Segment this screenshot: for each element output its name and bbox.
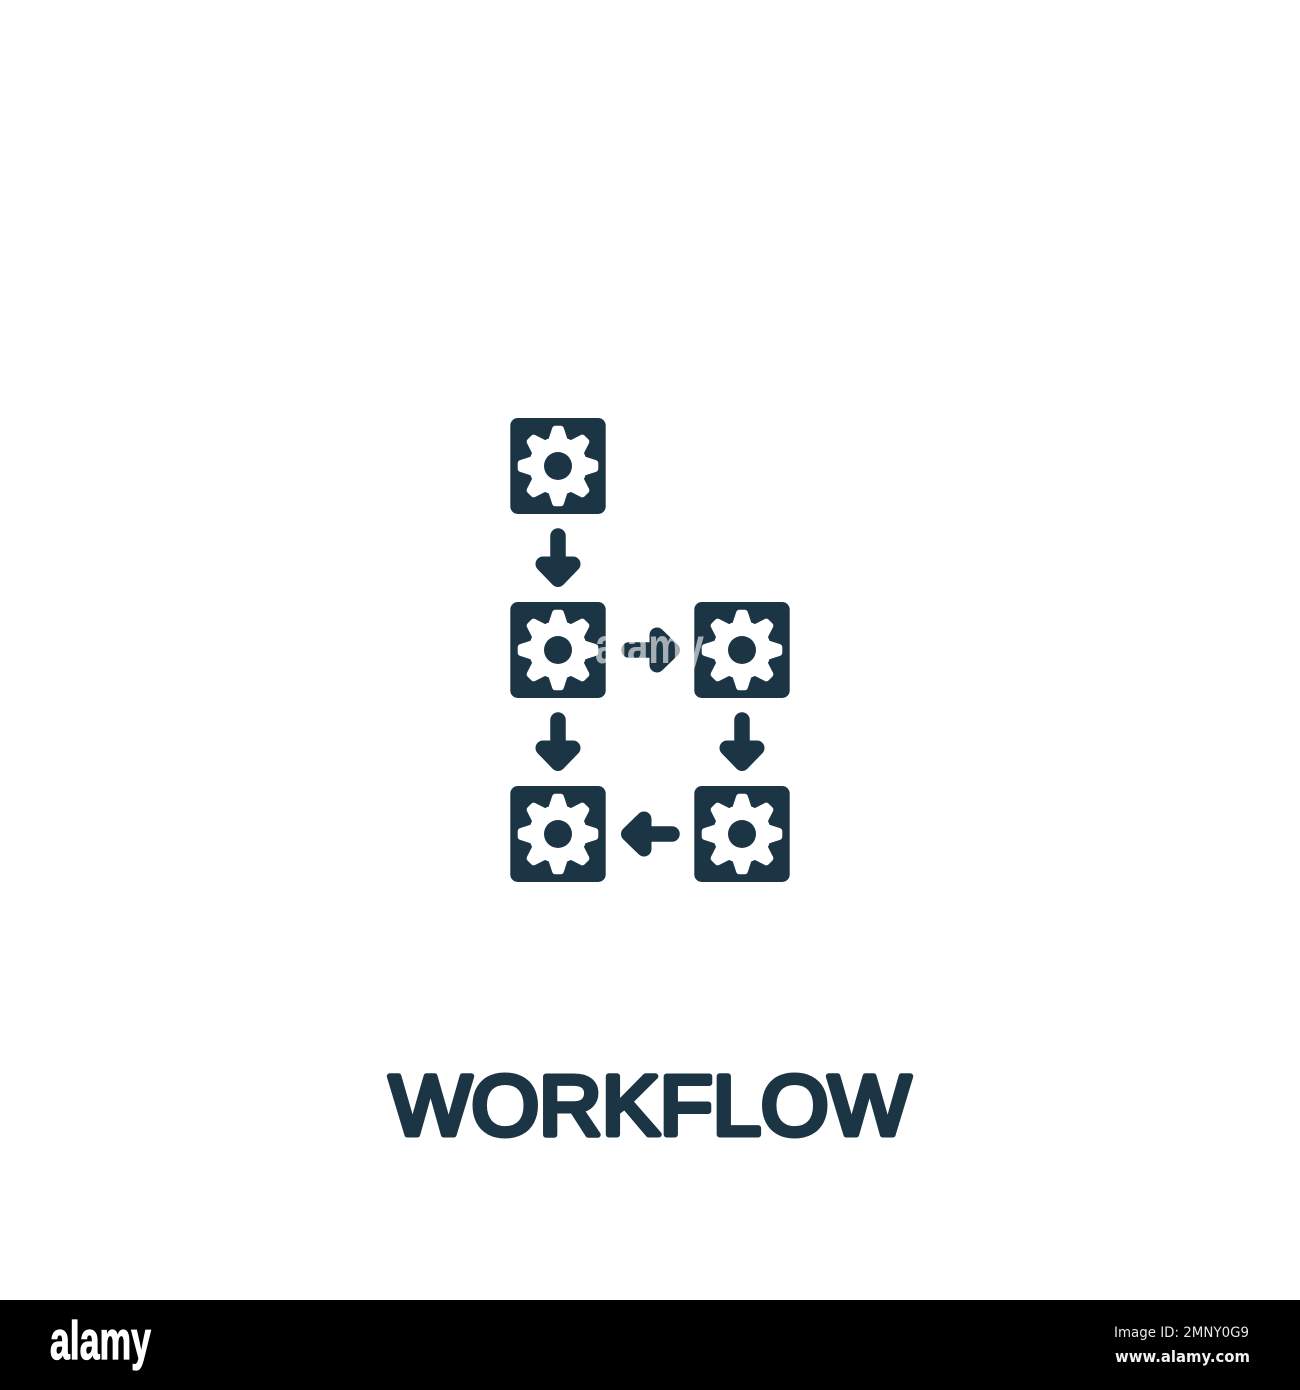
website: www.alamy.com [1115,1347,1250,1366]
arrow: bottom right to bottom left [628,819,672,849]
gear tile: bottom right [694,786,790,882]
arrow: middle left to middle right [629,635,672,665]
footer band [0,1300,1300,1390]
gear tile: bottom left [510,786,606,882]
arrow: top to middle [543,536,573,580]
workflow diagram icon [510,418,790,882]
gear tile: middle right [694,602,790,698]
footer logo: alamy [50,1311,151,1371]
title: WORKFLOW [390,1058,910,1152]
arrow: middle left to bottom left [543,720,573,764]
image id: Image ID: 2MNY0G9 [1114,1325,1249,1341]
gear tile: top [510,418,606,514]
arrow: middle right to bottom right [727,720,757,764]
watermark: alamy [595,618,704,674]
gear tile: middle left [510,602,606,698]
